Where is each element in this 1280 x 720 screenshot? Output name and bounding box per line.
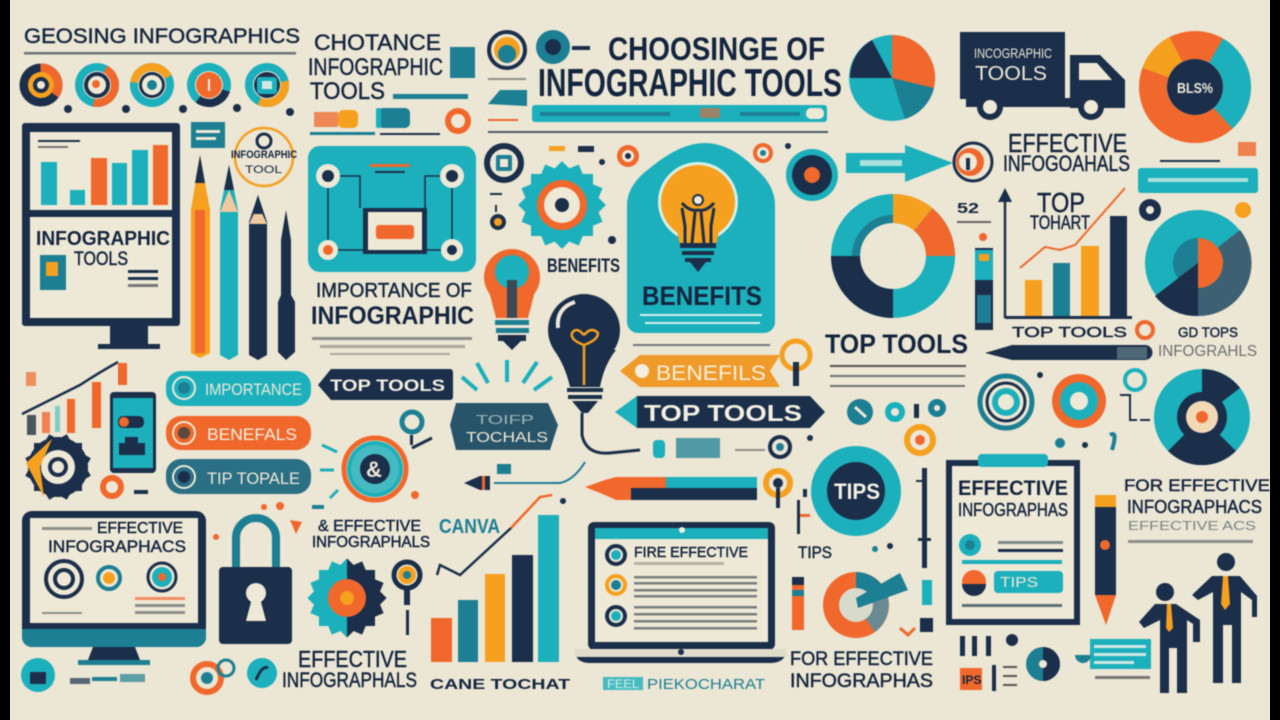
circle: tips: TIPS: [834, 479, 880, 504]
heading: choosing infographics top left: GEOSING INFOGRAPHICS: [24, 25, 300, 48]
heading: 52 note: [957, 200, 993, 330]
small icons bottom right: [960, 634, 1151, 691]
clipboard heading: EFFECTIVE: [958, 477, 1068, 500]
icon: padlock: [219, 518, 292, 644]
heading: chotance infographic tools: INFOGRAPHIC: [308, 54, 443, 81]
laptop heading: FIRE EFFECTIVE: [634, 544, 748, 561]
chart: left trend line: [22, 362, 127, 435]
pills: importance benefits tips: TIP TOPALE: [207, 469, 300, 488]
monitor label: TOOLS: [74, 249, 128, 270]
chart: right ring pie: [1139, 199, 1252, 316]
icon: orange bulb: [484, 249, 540, 350]
icon: delivery truck: TOOLS: [975, 63, 1047, 85]
icon row: five ring badges: [24, 60, 294, 116]
heading: effective infogoahals: EFFECTIVE: [1008, 128, 1127, 158]
icon: teal gear: [518, 161, 606, 249]
clipboard heading: [958, 477, 1068, 520]
small icons column: [487, 143, 791, 244]
panel: importance teal board: [308, 146, 476, 272]
heading: chotance infographic tools: TOOLS: [310, 78, 385, 105]
icon: fountain pen: [985, 322, 1153, 360]
heading: chotance infographic tools: CHOTANCE: [314, 30, 441, 55]
icons: small rings: [980, 370, 1150, 450]
teal strip label: [1138, 142, 1258, 193]
heading: gd tops infograhls: GD TOPS: [1178, 324, 1238, 340]
badge: infographic tools: TOOL: [245, 164, 282, 176]
icon: vertical pen: [1095, 495, 1116, 625]
heading: effective infogoahals: INFOGOAHALS: [1003, 151, 1130, 176]
heading: 52 note: 52: [957, 200, 979, 217]
monitor heading: EFFECTIVE: [97, 520, 183, 537]
icon: delivery truck: [960, 32, 1125, 120]
heading: effective infographals middle: INFOGRAPHALS: [312, 534, 430, 551]
icon: half gear with orange core: [307, 558, 420, 638]
icon: small target: [786, 149, 838, 201]
badge: infographic tools: [191, 122, 297, 186]
icon: target with arrow: [823, 572, 908, 638]
icon: four pencils: [191, 155, 295, 360]
chart: center donut: [846, 208, 940, 304]
banner: top tools: TOP TOOLS: [644, 400, 802, 426]
icon: two people: [1139, 553, 1257, 693]
icons: row below top tools: [847, 399, 946, 425]
heading: chotance infographic tools: [308, 30, 475, 105]
heading: importance of infographic: INFOGRAPHIC: [311, 302, 474, 330]
panel: benefits card: [627, 143, 775, 346]
heading: importance of infographic: IMPORTANCE OF: [316, 280, 472, 302]
heading: effective infographals middle: & EFFECTIVE: [318, 518, 421, 535]
heading: effective infographals middle: [312, 518, 430, 551]
heading: for effective infographas: [790, 649, 933, 692]
banner: top tools left: TOP TOOLS: [330, 376, 445, 395]
heading: for effective infographacs: INFOGRAPHACS: [1127, 497, 1262, 517]
heading: for effective infographacs: EFFECTIVE ACS: [1128, 518, 1256, 533]
icon: big navy bulb with cord: [462, 294, 640, 453]
heading: effective infographals bottom: INFOGRAPHALS: [282, 669, 417, 692]
label: cane tochat: CANE TOCHAT: [430, 676, 570, 693]
icon: ampersand ring: &: [366, 457, 382, 482]
chart: top-right ring: [1138, 30, 1252, 144]
title: [538, 31, 842, 105]
badge: infographic tools: INFOGRAPHIC: [231, 149, 297, 161]
icon: dark tag: TOIFP: [476, 412, 534, 427]
monitor label: INFOGRAPHIC: [36, 228, 170, 250]
icons: small marks near lock: [213, 502, 324, 540]
monitor heading: [42, 520, 186, 556]
icon: small pen nib: [464, 462, 790, 508]
small icons under banner: [653, 435, 813, 458]
label: feel piekocharat: PIEKOCHARAT: [647, 676, 765, 693]
icon: phone: [110, 392, 156, 473]
icon: horizontal orange pencil: [585, 477, 757, 500]
icon: small orange ring: [100, 475, 148, 499]
banner: benefits: BENEFILS: [656, 362, 766, 385]
pills: importance benefits tips: IMPORTANCE: [205, 380, 302, 399]
chart: top tohart bars: TOHART: [1030, 213, 1090, 234]
monitor: infographic tools chart: [22, 123, 180, 349]
pills: importance benefits tips: [166, 371, 311, 494]
arrow: teal: [846, 145, 953, 182]
heading: effective infographals bottom: [282, 646, 417, 692]
text: canva: CANVA: [439, 516, 500, 538]
title: CHOOSINGE OF: [608, 31, 825, 67]
monitor label: [36, 228, 170, 270]
heading: for effective infographas: FOR EFFECTIVE: [790, 649, 933, 670]
heading: effective infographals bottom: EFFECTIVE: [298, 646, 407, 672]
banner: top tools: [615, 396, 825, 428]
chart: top tohart bars: TOP: [1037, 187, 1085, 218]
icon: dark gear: [25, 434, 91, 500]
chart: bottom bars: [431, 495, 566, 662]
card label: BENEFITS: [642, 281, 762, 311]
icon: laptop: [575, 522, 786, 663]
heading: for effective infographacs: FOR EFFECTIVE: [1124, 476, 1270, 495]
title: INFOGRAPHIC TOOLS: [538, 62, 842, 105]
small icons row under heading: [310, 108, 471, 135]
heading: gd tops infograhls: INFOGRAHLS: [1158, 343, 1257, 360]
title strip: [488, 78, 828, 133]
monitor heading: INFOGRAPHACS: [48, 537, 186, 556]
icon: dark tag: TOCHALS: [466, 429, 548, 446]
label: tips: TIPS: [798, 543, 832, 562]
small icons bottom right: IPS: [962, 673, 981, 687]
banner: top tools left: [318, 369, 453, 400]
heading: effective infogoahals: [1003, 128, 1130, 176]
banner: benefits: [620, 341, 810, 387]
heading: for effective infographas: INFOGRAPHAS: [790, 671, 933, 692]
panel: clipboard: [946, 454, 1080, 625]
chart: top tohart bars: [998, 187, 1132, 319]
clipboard heading: INFOGRAPHAS: [958, 500, 1068, 520]
heading: gd tops infograhls: [1158, 324, 1257, 360]
icon: title rings: [489, 30, 590, 68]
icon: delivery truck: INCOGRAPHIC: [974, 45, 1052, 61]
icon: light bulb: [658, 162, 738, 272]
benefits label: BENEFITS: [547, 256, 620, 277]
heading: top tools: TOP TOOLS: [825, 329, 968, 359]
chart: top-right ring: BLS%: [1177, 80, 1213, 97]
label: feel piekocharat: [603, 676, 765, 693]
icon: dark tag: [450, 403, 558, 450]
tips tag: TIPS: [1000, 574, 1038, 591]
tips tag: [994, 571, 1063, 593]
heading: importance of infographic: [311, 280, 474, 355]
icon: amber spiral: [904, 424, 936, 456]
bottom-left small icons: [21, 658, 277, 692]
icon: keyhole ring: [954, 143, 992, 181]
chart: dark pie right: [1154, 369, 1250, 465]
pills: importance benefits tips: BENEFALS: [207, 425, 297, 444]
label: top tools small: TOP TOOLS: [1012, 324, 1127, 341]
circle: tips: [811, 446, 901, 536]
ticks around tips: [797, 468, 931, 568]
label: feel piekocharat: FEEL: [607, 677, 639, 691]
icon: bar and stack by target: [792, 577, 933, 635]
chart: top pie: [849, 35, 935, 121]
icon: ampersand ring: [320, 412, 432, 500]
heading: for effective infographacs: [1124, 476, 1270, 543]
panel: bottom-left monitor: [22, 511, 206, 665]
